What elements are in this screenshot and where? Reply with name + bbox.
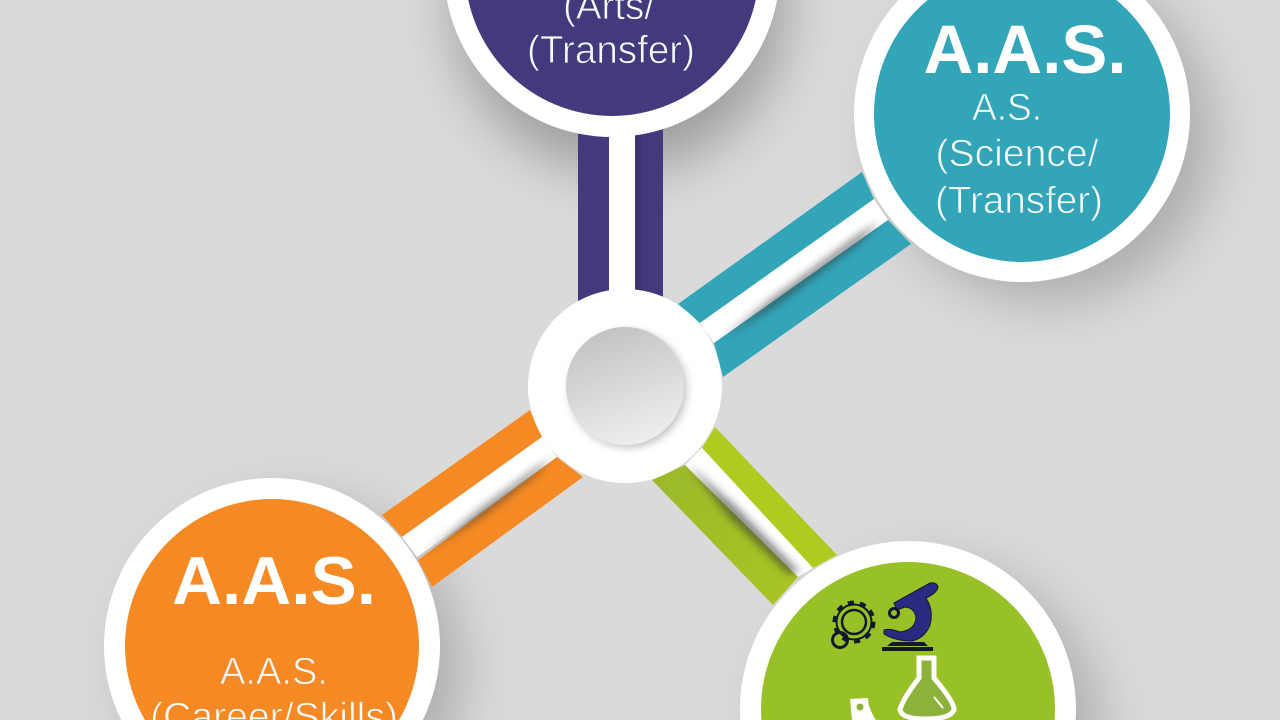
- label: science transfer: (Science/: [936, 133, 1099, 175]
- icon: flask: [900, 658, 954, 719]
- circle: purple Arts transfer: [444, 0, 780, 137]
- label: arts transfer: (Transfer): [527, 29, 695, 72]
- icon: small tube: [850, 698, 876, 720]
- heading: A.A.S. orange: A.A.S.: [172, 543, 376, 619]
- connector: green to hub: [652, 427, 837, 605]
- connector: teal to hub: [678, 172, 911, 377]
- label: career skills: [150, 651, 398, 720]
- circle: green icons: [740, 541, 1076, 720]
- connector: orange to hub: [382, 410, 583, 587]
- label: career skills: A.A.S.: [220, 651, 328, 693]
- label: science transfer: [935, 87, 1103, 222]
- circle: teal Science transfer: [854, 0, 1190, 282]
- label: science transfer: (Transfer): [935, 180, 1103, 222]
- heading: A.A.S. teal: A.A.S.: [924, 11, 1126, 88]
- hub: [528, 289, 722, 483]
- label: arts transfer: [527, 0, 695, 72]
- circle: orange Career skills: [104, 478, 440, 720]
- connector: purple to hub: [578, 110, 663, 305]
- label: science transfer: A.S.: [972, 87, 1042, 129]
- icon: microscope: [882, 583, 938, 651]
- icon: gears: [832, 603, 873, 648]
